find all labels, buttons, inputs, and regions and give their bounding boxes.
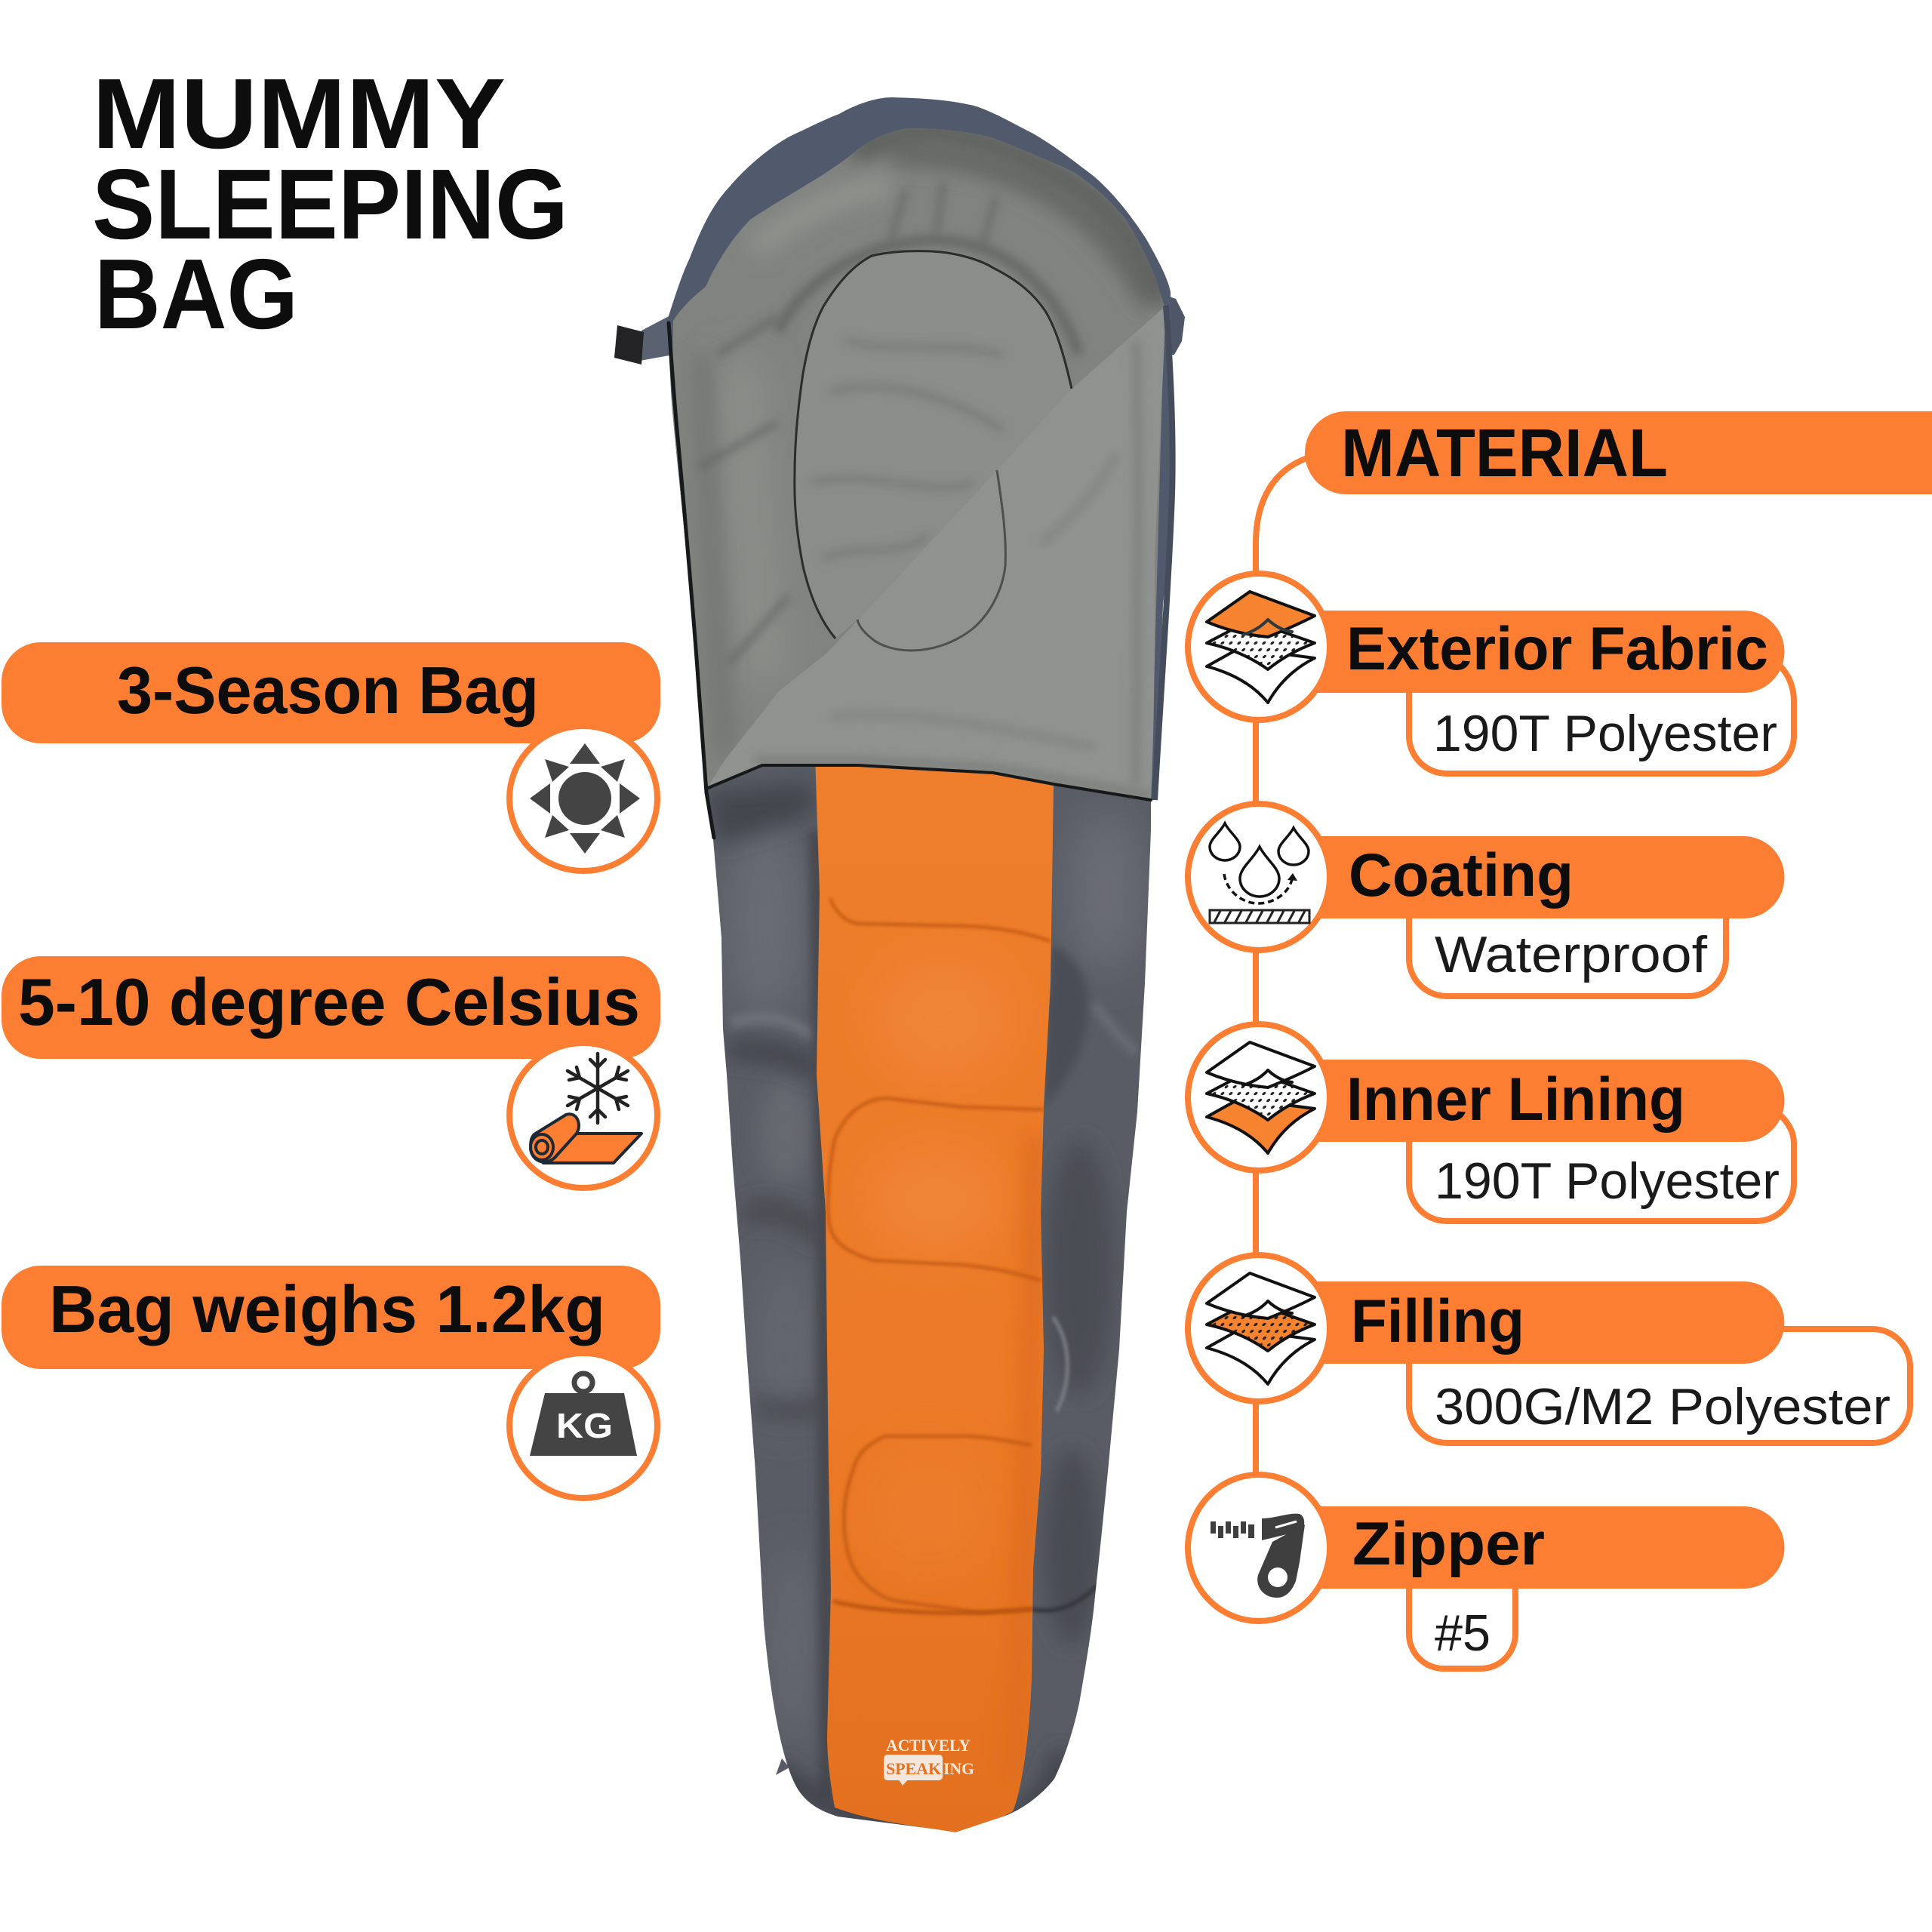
connector line xyxy=(1256,458,1307,1555)
lower body shell xyxy=(702,755,1151,1841)
folded flap xyxy=(706,306,1166,800)
hood tab: black strap xyxy=(614,315,673,365)
icon: zipper xyxy=(1188,1475,1330,1621)
black zipper seams xyxy=(669,323,1151,838)
value: Waterproof: Waterproof xyxy=(1435,926,1707,983)
item: Inner Lining xyxy=(1188,1024,1794,1221)
icon: weight: KG xyxy=(556,1406,613,1445)
label: Bag weighs 1.2kg: Bag weighs 1.2kg xyxy=(49,1272,605,1346)
title: MUMMY xyxy=(92,58,506,169)
icon: snowflake and sleeping mat xyxy=(509,1043,657,1188)
label: Inner Lining: Inner Lining xyxy=(1346,1066,1685,1134)
label: Coating: Coating xyxy=(1349,841,1574,909)
hood right edge fold xyxy=(1155,306,1173,800)
stitches are part of panel shading xyxy=(830,898,1051,941)
value box: 300G/M2 Polyester xyxy=(1409,1329,1910,1443)
watermark logo xyxy=(884,1736,974,1786)
pill: Inner Lining xyxy=(1283,1060,1784,1142)
pill: Bag weighs 1.2kg xyxy=(2,1266,660,1369)
label: 3-Season Bag: 3-Season Bag xyxy=(117,653,539,728)
value: 190T Polyester: 190T Polyester xyxy=(1435,1152,1780,1210)
pill: Zipper xyxy=(1283,1506,1784,1589)
hood outer shell xyxy=(667,97,1174,800)
watermark logo: SPEAK xyxy=(886,1759,941,1778)
panel: Bag weighs 1.2kg xyxy=(2,1266,660,1498)
icon: sun xyxy=(509,726,657,871)
orange center panel xyxy=(815,755,1054,1832)
label: Zipper: Zipper xyxy=(1352,1510,1545,1578)
sleeping bag photo illustration xyxy=(614,97,1185,1841)
panel: 3-Season Bag xyxy=(2,642,660,871)
item: Filling xyxy=(1188,1255,1910,1443)
material header bar xyxy=(1305,411,1932,494)
inner grey lining xyxy=(672,128,1164,800)
value box: 190T Polyester xyxy=(1409,1109,1794,1221)
icon: water drops xyxy=(1188,804,1330,950)
title xyxy=(92,58,568,349)
pill: Coating xyxy=(1283,836,1784,918)
value: 190T Polyester: 190T Polyester xyxy=(1433,705,1777,762)
headrest oval xyxy=(795,251,1072,638)
title: SLEEPING xyxy=(92,149,568,260)
watermark logo: ACTIVELY xyxy=(886,1736,971,1755)
material header bar: MATERIAL xyxy=(1341,416,1668,491)
icon: fabric layers, bottom orange xyxy=(1188,1024,1330,1171)
icon: fabric layers, middle orange xyxy=(1188,1255,1330,1401)
item: Coating xyxy=(1188,804,1784,996)
watermark logo: ING xyxy=(943,1759,974,1778)
item: Zipper xyxy=(1188,1475,1784,1669)
pill: 3-Season Bag xyxy=(2,642,660,743)
right zip tab xyxy=(1167,296,1185,355)
value box: Waterproof xyxy=(1409,909,1726,996)
label: 5-10 degree Celsius: 5-10 degree Celsius xyxy=(18,964,640,1039)
pill: Exterior Fabric xyxy=(1283,611,1784,693)
icon: weight xyxy=(509,1353,657,1498)
label: Filling: Filling xyxy=(1351,1287,1524,1355)
panel: material specifications xyxy=(1188,411,1932,1669)
value: 300G/M2 Polyester: 300G/M2 Polyester xyxy=(1435,1378,1890,1435)
rolled mat xyxy=(531,1114,641,1163)
label: Exterior Fabric: Exterior Fabric xyxy=(1346,615,1768,683)
icon: fabric layers, top orange xyxy=(1188,574,1330,720)
value box: 190T Polyester xyxy=(1409,660,1794,774)
snowflake xyxy=(568,1054,628,1123)
pill: 5-10 degree Celsius xyxy=(2,956,660,1059)
title: BAG xyxy=(94,238,298,349)
value box: #5 xyxy=(1409,1581,1515,1669)
item: Exterior Fabric xyxy=(1188,574,1794,774)
value: #5: #5 xyxy=(1435,1604,1491,1662)
panel: 5-10 degree Celsius xyxy=(2,956,660,1188)
pill: Filling xyxy=(1283,1281,1784,1364)
